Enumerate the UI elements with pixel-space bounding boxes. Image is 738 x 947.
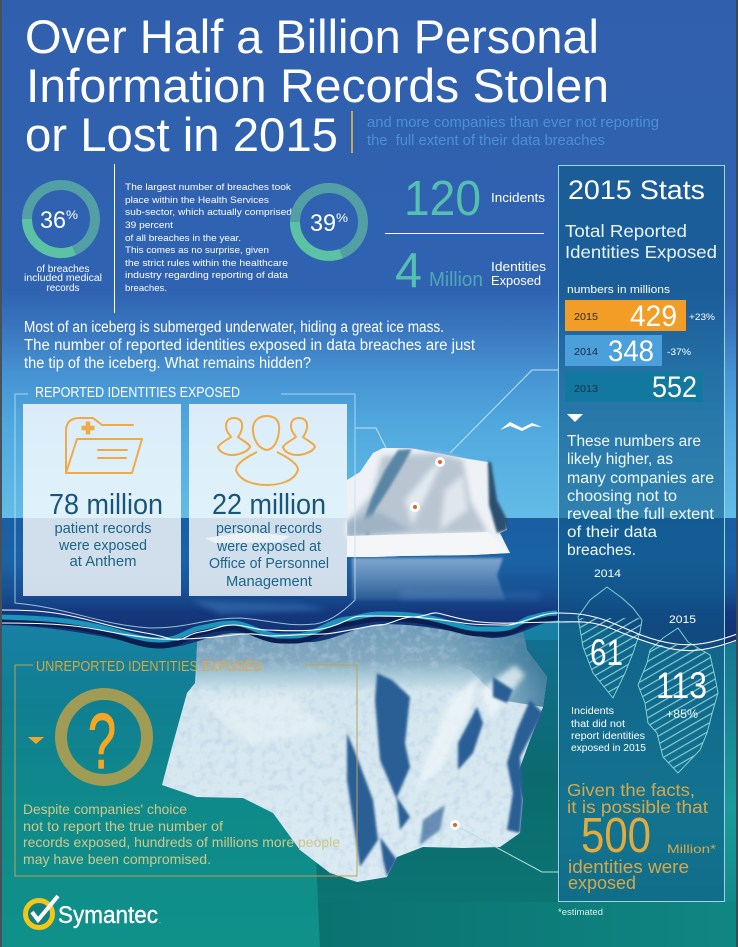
marker dot 2 [410, 502, 420, 512]
text: personal records [209, 520, 329, 590]
text: personal records: personal records [216, 520, 322, 537]
given the facts text [567, 780, 708, 817]
estimated footnote: *estimated [558, 907, 603, 917]
reported heading: REPORTED IDENTITIES EXPOSED [35, 384, 240, 401]
healthcare paragraph: of all breaches in the year. [125, 233, 241, 244]
total reported heading [565, 221, 717, 262]
background: underwater [0, 600, 738, 947]
bar: 2013 [565, 371, 703, 404]
incidents note: exposed in 2015 [571, 743, 646, 754]
higher numbers text: choosing not to [567, 488, 677, 505]
bar: 2014 [565, 335, 691, 368]
bar: 2015: 429 [630, 300, 677, 333]
iceberg intro text: the tip of the iceberg. What remains hidden? [24, 355, 311, 372]
unreported text: not to report the true number of [23, 818, 223, 834]
mini iceberg: 2015: 113 [656, 665, 707, 706]
iceberg reflection on the sea [352, 558, 505, 600]
stat: 500 million [581, 809, 716, 863]
bar: 2014: -37% [667, 347, 691, 357]
title: or Lost in 2015 [25, 108, 338, 161]
stat: 4 million identities exposed [395, 244, 547, 298]
healthcare paragraph: sub-sector, which actually comprised [125, 207, 292, 218]
unreported heading: EXPOSED [202, 658, 262, 675]
healthcare paragraph: The largest number of breaches took [125, 182, 291, 193]
subtitle: the full extent of their data breaches [367, 133, 605, 149]
vertical divider [114, 164, 115, 313]
logo: Symantec: Symantec [58, 902, 158, 929]
text: 22 million: 22 million [212, 489, 326, 521]
healthcare paragraph: industry regarding reporting of data [125, 270, 289, 281]
bar: 2014: 348 [608, 335, 654, 368]
stat: 120 incidents [404, 172, 546, 226]
stat: 500 million: Million* [667, 842, 716, 856]
stat: 4 million identities exposed: Million [429, 269, 483, 291]
text: personal records: Office of Personnel [209, 555, 329, 572]
icon: medical folder [66, 418, 142, 473]
ice highlights [200, 665, 525, 790]
logo: Symantec: . [159, 918, 161, 925]
incidents note: that did not [571, 719, 625, 730]
text: 78 million: 78 million [49, 489, 163, 521]
incidents note: report identities [571, 731, 645, 742]
higher numbers text: likely higher, as [567, 451, 673, 468]
icon: people [218, 416, 315, 485]
stat: 4 million identities exposed: Identities [491, 259, 547, 274]
text: personal records: Management [226, 573, 313, 590]
unreported text: Despite companies' choice [23, 801, 187, 817]
donut: 36% [27, 185, 95, 253]
higher numbers text: breaches. [567, 542, 636, 559]
higher numbers text: many companies are [567, 470, 714, 487]
marker dot 1 [435, 457, 445, 467]
text: patient records: were exposed [58, 537, 147, 554]
mini iceberg: 2014: 61 [590, 632, 623, 673]
pointer line to reported box [355, 428, 386, 448]
panel: 2015 stats [558, 166, 724, 902]
healthcare paragraph [125, 182, 292, 294]
subtitle [367, 115, 659, 149]
icon: down triangle [28, 737, 44, 744]
given the facts text: it is possible that [567, 797, 708, 817]
caption: 36%: records [46, 283, 80, 294]
icon: question mark ring [61, 694, 147, 785]
higher numbers text [567, 433, 715, 559]
donut: 39%: % [336, 211, 348, 225]
stat: 120 incidents: 120 [404, 172, 481, 226]
iceberg intro text [24, 319, 476, 372]
logo: Symantec [26, 896, 161, 929]
stat: 500 million: 500 [581, 809, 651, 863]
subtitle: and more companies than ever not reporting [367, 115, 659, 131]
healthcare paragraph: 39 percent [125, 220, 173, 231]
healthcare paragraph: the strict rules within the healthcare [125, 258, 288, 269]
background: sky [0, 0, 738, 518]
wave band [0, 613, 557, 645]
title divider [351, 111, 353, 153]
healthcare paragraph: breaches. [125, 283, 167, 294]
unreported text: records exposed, hundreds of millions more people [23, 834, 340, 850]
pointer line to stats panel bottom [455, 825, 558, 872]
stat: 4 million identities exposed: 4 [395, 244, 422, 298]
bird [500, 422, 542, 431]
caption: 36%: included medical [24, 273, 102, 284]
total reported heading: Total Reported [565, 221, 687, 241]
donut: 36%: % [66, 208, 78, 222]
stat: 120 incidents: Incidents [491, 190, 546, 205]
donut: 39%: 39 [310, 210, 336, 237]
iceberg intro text: Most of an iceberg is submerged underwater, hiding a great ice mass. [24, 319, 444, 336]
unreported text [23, 801, 340, 867]
sea highlights [190, 590, 540, 614]
text: personal records: were exposed at [216, 538, 322, 555]
background: sea surface [0, 518, 738, 650]
marker dot 3 [450, 820, 460, 830]
ice shadow streaks [347, 673, 543, 877]
identities were exposed text: exposed [568, 873, 636, 893]
donut: 36%: 36 [40, 207, 66, 234]
higher numbers text: of their data [567, 524, 657, 541]
text: patient records [54, 520, 152, 570]
panel: reported identities exposed [15, 384, 355, 628]
identities were exposed text [568, 857, 689, 893]
caption: 36% [24, 264, 102, 294]
panel: unreported identities exposed [15, 658, 357, 876]
icon: white triangle [567, 414, 583, 422]
given the facts text: Given the facts, [567, 780, 695, 800]
stat divider [385, 233, 544, 234]
identities were exposed text: identities were [568, 857, 689, 877]
unreported heading: UNREPORTED IDENTITIES [36, 658, 198, 675]
label: 2014: 2014 [594, 568, 621, 580]
caption: 36%: of breaches [36, 264, 90, 275]
title [25, 10, 609, 161]
donut: 39% [295, 188, 363, 256]
bar: 2014: 2014 [574, 346, 598, 358]
total reported heading: Identities Exposed [565, 242, 717, 262]
numbers in millions note: numbers in millions [567, 284, 671, 296]
card: Anthem [23, 404, 181, 596]
card: Office of Personnel Management [189, 404, 347, 596]
incidents note: Incidents [571, 706, 614, 717]
bar: 2015 [565, 300, 715, 333]
higher numbers text: reveal the full extent [567, 506, 715, 523]
title: Over Half a Billion Personal [25, 10, 599, 63]
white wave lines [2, 610, 737, 651]
incidents note [571, 706, 646, 754]
stats heading: 2015 Stats [568, 175, 705, 205]
title: Information Records Stolen [26, 59, 609, 112]
pointer line to stats panel top [450, 370, 558, 453]
mini iceberg: 2015 [635, 628, 720, 775]
bar: 2013: 2013 [574, 383, 598, 395]
mini iceberg: 2015: +85% [666, 707, 698, 721]
text: patient records: at Anthem [70, 553, 136, 570]
iceberg below water [162, 615, 547, 882]
iceberg intro text: The number of reported identities exposed in data breaches are just [24, 337, 476, 354]
higher numbers text: These numbers are [567, 433, 701, 450]
healthcare paragraph: This comes as no surprise, given [125, 245, 269, 256]
iceberg above water [347, 448, 510, 557]
bar: 2015: +23% [689, 312, 715, 322]
icon: question mark ring: ? [88, 697, 116, 785]
stat: 4 million identities exposed: Exposed [491, 273, 541, 288]
text: patient records: patient records [54, 520, 152, 537]
label: 2015: 2015 [669, 614, 696, 626]
mini iceberg: 2014 [575, 587, 645, 703]
ice glimpse behind card [205, 532, 290, 543]
unreported text: may have been compromised. [23, 851, 211, 867]
bar: 2013: 552 [652, 371, 697, 404]
healthcare paragraph: place within the Health Services [125, 195, 269, 206]
bar: 2015: 2015 [574, 311, 598, 323]
